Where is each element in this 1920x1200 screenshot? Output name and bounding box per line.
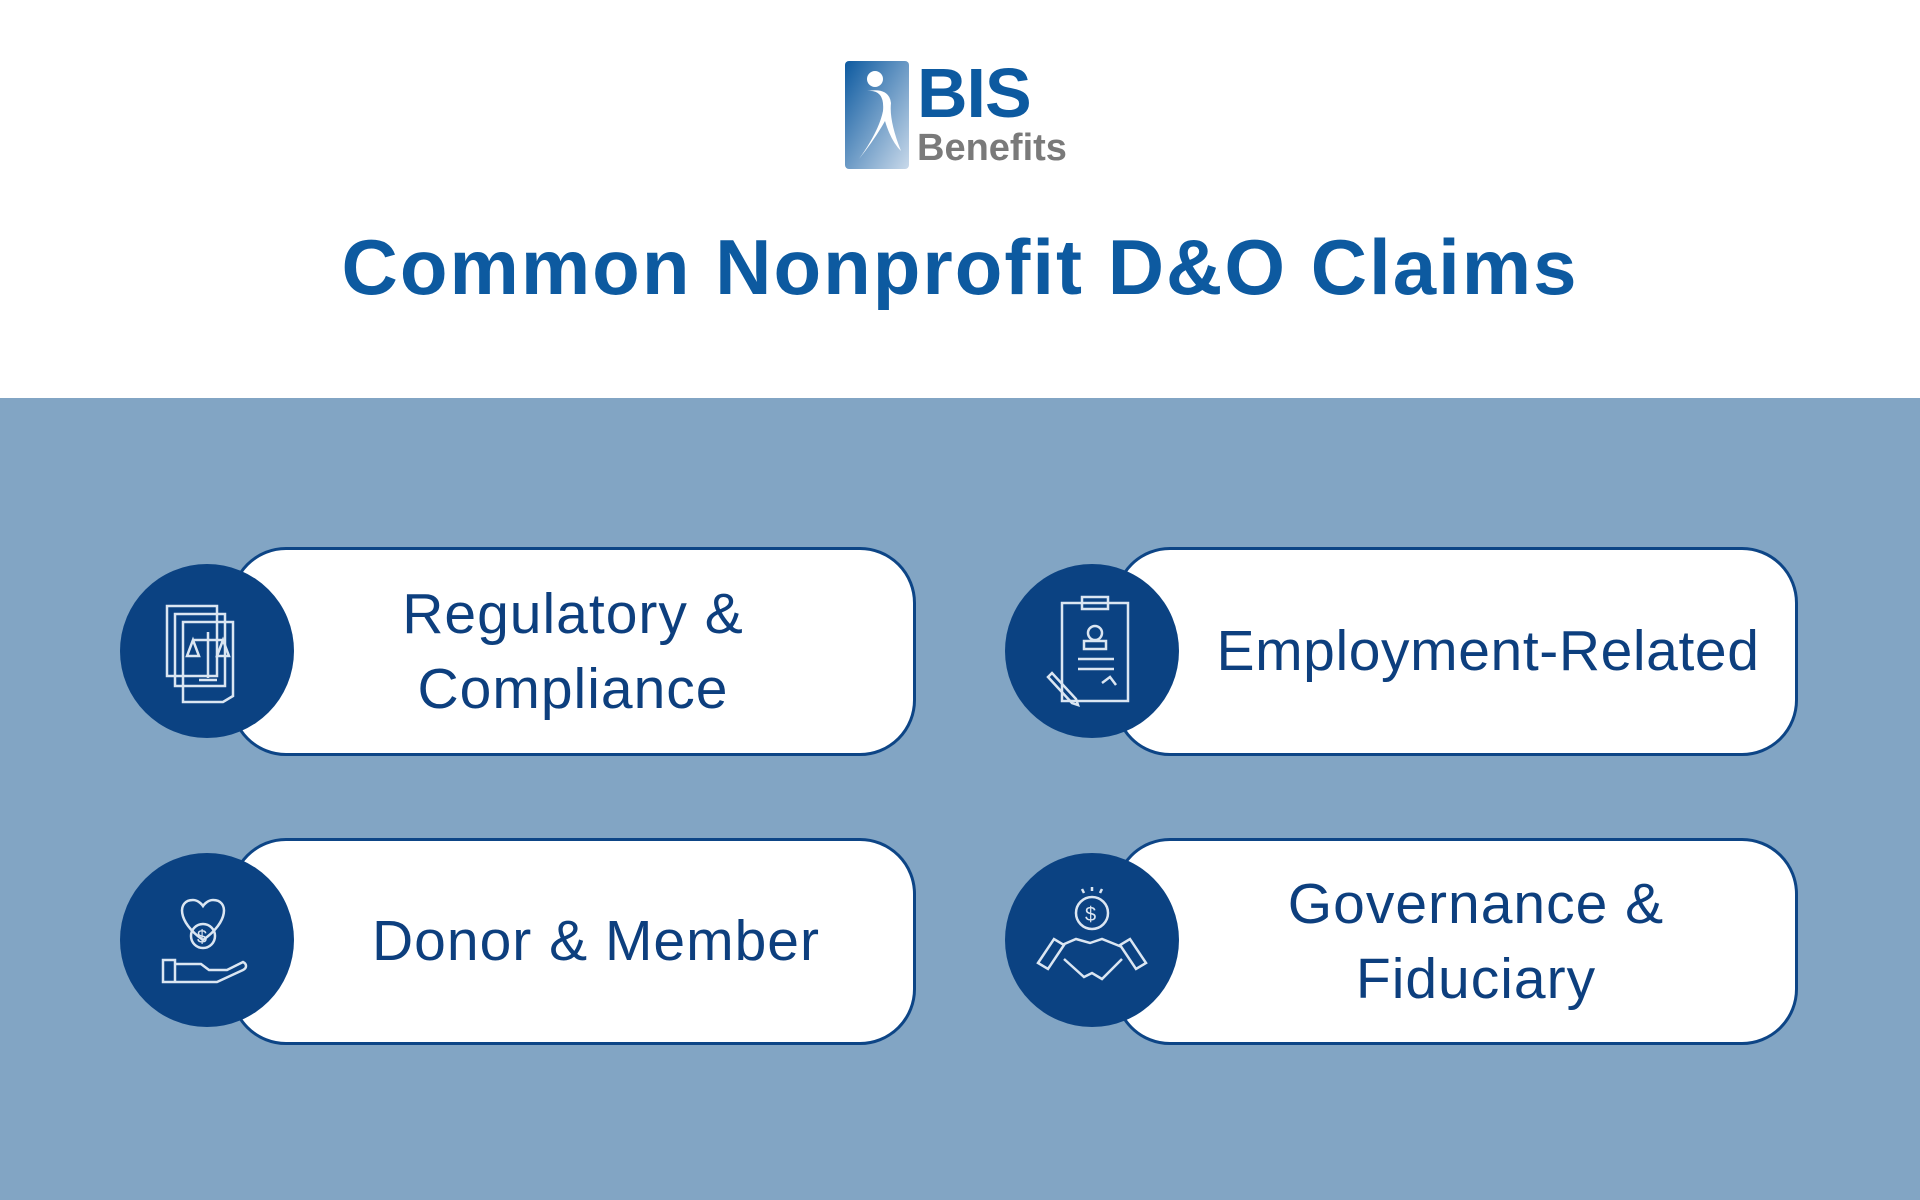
icon: clipboard (1005, 564, 1179, 738)
logo: Benefits (917, 127, 1067, 169)
text: Compliance (418, 656, 728, 720)
logo: BIS (917, 54, 1031, 132)
icon: heart hand: $ (197, 927, 207, 947)
card: employment (1005, 547, 1798, 756)
card: governance (1005, 838, 1798, 1045)
text: Fiduciary (1356, 946, 1596, 1010)
text: Governance & (1288, 872, 1664, 936)
text: Regulatory & (402, 582, 744, 646)
icon: heart hand (120, 853, 294, 1027)
icon: handshake coin: $ (1085, 904, 1096, 926)
card: donor (120, 838, 916, 1045)
text: Employment-Related (1216, 619, 1760, 683)
logo (845, 54, 1067, 169)
title: Common Nonprofit D&O Claims (342, 223, 1578, 311)
text: Donor & Member (372, 909, 820, 973)
icon: handshake coin (1005, 853, 1179, 1027)
icon: legal documents scale (120, 564, 294, 738)
icon: logo mark (845, 61, 909, 169)
card: regulatory (120, 547, 916, 756)
